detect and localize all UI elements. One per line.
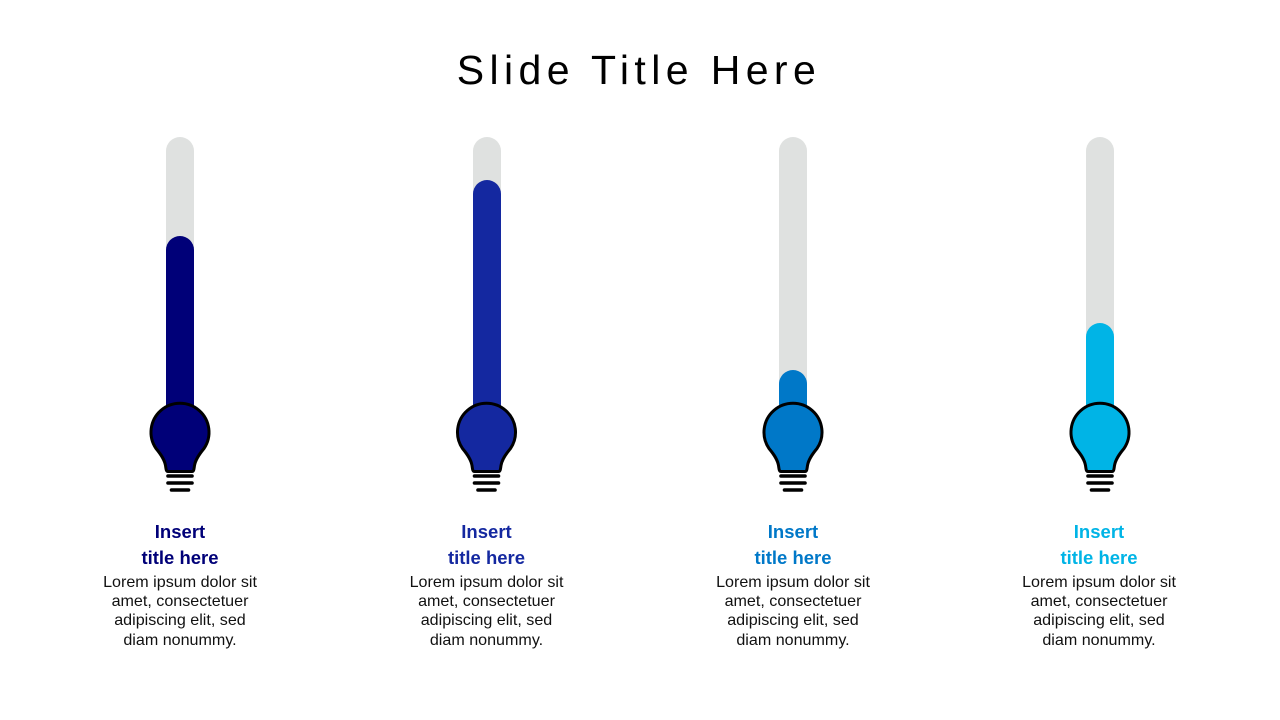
column text 1: diam nonummy. <box>123 631 237 649</box>
column text 2: amet, consectetuer <box>418 592 555 610</box>
column text 4: amet, consectetuer <box>1031 592 1167 610</box>
column text 1: adipiscing elit, sed <box>114 611 246 629</box>
thermometer 4 <box>1071 137 1129 490</box>
column text 3: title here <box>754 547 832 568</box>
column text 2: diam nonummy. <box>430 631 543 649</box>
column text 2: Insert <box>461 521 512 542</box>
column text 4: diam nonummy. <box>1042 631 1156 649</box>
column text 4: Insert <box>1074 521 1124 542</box>
column text 1 <box>103 521 257 649</box>
column text 1: Insert <box>155 521 205 542</box>
column text 1: title here <box>141 547 219 568</box>
column text 3 <box>716 521 870 649</box>
thermometer 2 <box>458 137 516 490</box>
column text 1: Lorem ipsum dolor sit <box>103 573 257 591</box>
column text 4: Lorem ipsum dolor sit <box>1022 573 1176 591</box>
column text 2: title here <box>448 547 525 568</box>
column text 3: amet, consectetuer <box>725 592 861 610</box>
column text 3: Lorem ipsum dolor sit <box>716 573 870 591</box>
column text 4: title here <box>1060 547 1138 568</box>
column text 4: adipiscing elit, sed <box>1033 611 1165 629</box>
thermometer 1 <box>151 137 209 490</box>
thermometer 3 <box>764 137 822 490</box>
column text 2: Lorem ipsum dolor sit <box>410 573 563 591</box>
column text 3: adipiscing elit, sed <box>727 611 859 629</box>
column text 3: Insert <box>768 521 818 542</box>
column text 2: adipiscing elit, sed <box>421 611 552 629</box>
column text 3: diam nonummy. <box>736 631 850 649</box>
column text 1: amet, consectetuer <box>112 592 248 610</box>
title: Slide Title Here <box>457 47 821 93</box>
column text 2 <box>410 521 564 649</box>
column text 4 <box>1022 521 1176 649</box>
